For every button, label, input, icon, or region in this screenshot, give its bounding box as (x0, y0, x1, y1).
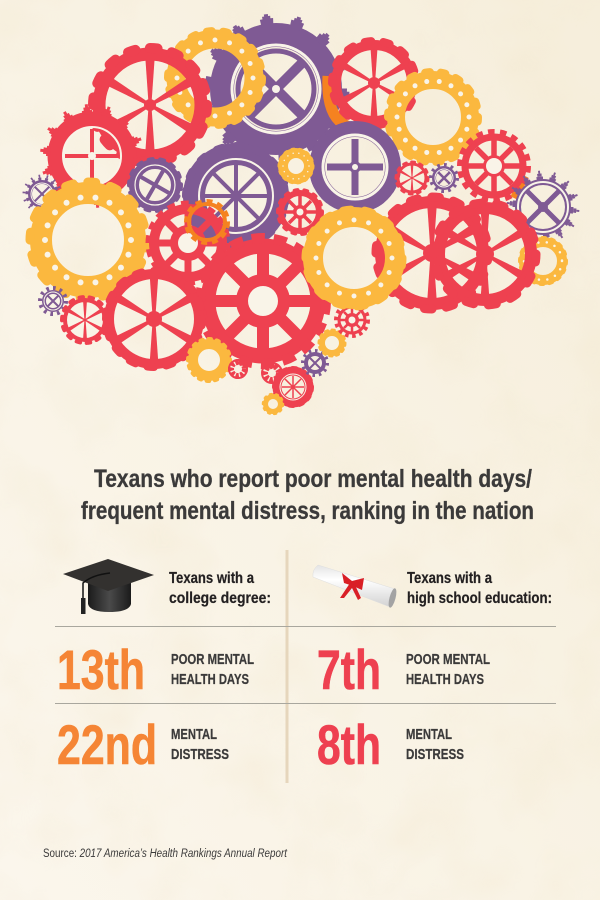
gear: large purple top (202, 15, 350, 163)
stat: college poor mental health days: HEALTH DAYS (171, 672, 249, 688)
gear: small red right (396, 162, 428, 194)
gear: purple far right (508, 172, 578, 242)
illustration: brain made of gears (24, 15, 578, 414)
heading: college degree (169, 570, 271, 607)
gear: tiny red two (262, 363, 282, 383)
gear: purple mid right (312, 124, 398, 210)
heading: high school education: Texans with a (407, 570, 492, 587)
stat: college mental distress: 22nd (57, 713, 157, 776)
gear: large red centre (200, 238, 326, 364)
gear: red top right (332, 41, 416, 125)
gear: red sharp-toothed left (42, 106, 142, 206)
gear: yellow big left (30, 182, 146, 298)
icon: diploma scroll (313, 565, 398, 608)
gear: small red centre (278, 190, 322, 234)
gear: orange small right (514, 176, 525, 198)
gear: purple small bottom (303, 351, 327, 375)
gear: yellow centre right (306, 210, 402, 306)
gear: small purple lower left (40, 288, 66, 314)
gear: purple centre eight-spoke (186, 146, 286, 246)
gear: red eight-spoke right (460, 132, 528, 200)
gear: small red lower left (62, 297, 108, 343)
title (81, 465, 534, 525)
heading: college degree: college degree: (169, 590, 271, 607)
gear: small purple right (431, 165, 457, 191)
heading: college degree: Texans with a (169, 570, 254, 587)
stat: college mental distress: DISTRESS (171, 747, 229, 763)
stat: college mental distress: MENTAL (171, 727, 217, 743)
source note: Source: 2017 America’s Health Rankings Annual Report (43, 848, 288, 860)
stat: college poor mental health days: 13th (57, 638, 145, 701)
gear: yellow right (388, 72, 478, 162)
gear: yellow small bottom (188, 339, 230, 381)
gear: red ringed bottom (274, 368, 312, 406)
stat: high school mental distress: 8th (317, 713, 381, 776)
heading: high school education: high school education: (407, 590, 552, 607)
gear: large red six-spoke top (93, 48, 207, 162)
gear: red mid left (148, 203, 228, 283)
stat: high school poor mental health days (317, 638, 490, 701)
gear: red six-spoke lower left (106, 271, 202, 367)
gear: purple small center-left (129, 159, 181, 211)
gear: yellow right small (520, 238, 566, 284)
gear: tiny red (229, 360, 247, 378)
gear: yellow strip behind red (152, 262, 190, 283)
gear: small purple far left (24, 176, 60, 212)
stat: high school mental distress: MENTAL (406, 727, 452, 743)
gear: orange under top-right (328, 76, 382, 133)
stat: college poor mental health days: POOR MENTAL (171, 652, 254, 668)
stat: high school mental distress (317, 713, 464, 776)
icon: graduation cap (63, 559, 154, 614)
table dividers (55, 550, 556, 783)
stat: college poor mental health days (57, 638, 254, 701)
gear: yellow tiny bottom (263, 394, 283, 414)
heading: high school education (407, 570, 552, 607)
gear: yellow top (168, 31, 262, 125)
gear: small yellow centre (279, 149, 313, 183)
gear: yellow small lower centre (319, 330, 345, 356)
gear: orange outline over red (186, 201, 228, 243)
stat: high school poor mental health days: 7th (317, 638, 381, 701)
stat: high school poor mental health days: POOR MENTAL (406, 652, 490, 668)
gear: red small lower centre (336, 304, 368, 336)
gear: large red right overlapped pair (376, 197, 536, 309)
stat: high school poor mental health days: HEALTH DAYS (406, 672, 484, 688)
stat: high school mental distress: DISTRESS (406, 747, 464, 763)
